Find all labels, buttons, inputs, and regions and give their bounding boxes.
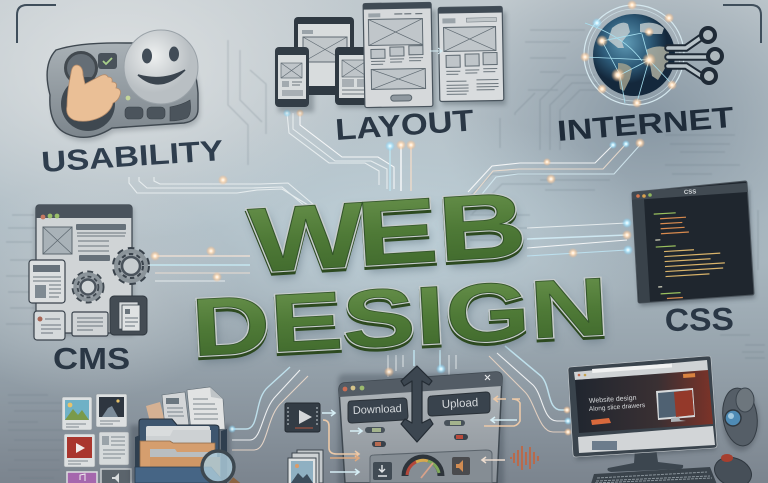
lower cards bbox=[34, 296, 147, 340]
icon: circuit connector bbox=[668, 28, 722, 83]
icon: small mouse bbox=[710, 452, 756, 483]
icon: check button bbox=[98, 53, 117, 69]
icon: smiley face bbox=[124, 30, 198, 104]
icon: keyboard bbox=[590, 467, 718, 483]
website lower strip bbox=[578, 426, 715, 453]
control buttons bbox=[125, 100, 191, 121]
icon: cms layout bbox=[29, 205, 147, 340]
browser wireframe large bbox=[363, 2, 433, 108]
word: web: WEB bbox=[246, 172, 529, 292]
button: download bbox=[348, 398, 408, 423]
icon: magnifier bbox=[202, 451, 241, 483]
icon: sound wave bbox=[510, 446, 538, 470]
label: layout: LAYOUT bbox=[334, 103, 475, 146]
nodes bbox=[580, 0, 677, 108]
title: web design bbox=[189, 172, 613, 380]
label: cms: CMS bbox=[53, 341, 130, 376]
css traces bbox=[527, 223, 627, 256]
word: design: DESIGN bbox=[189, 261, 611, 374]
icon: speaker button bbox=[452, 457, 470, 475]
website hero: Along slice drawers bbox=[589, 402, 646, 413]
icon: folder with documents bbox=[130, 387, 241, 483]
panel: download upload dialog bbox=[338, 366, 504, 483]
title shadow: WEB bbox=[248, 179, 531, 299]
button: upload bbox=[428, 392, 490, 416]
website hero bbox=[575, 370, 713, 433]
label: css: CSS bbox=[664, 301, 734, 338]
icon: thumbs-up hand bbox=[67, 65, 120, 121]
icon: desktop monitor bbox=[568, 356, 717, 472]
hero mini monitor bbox=[656, 388, 695, 422]
thumbnail document bbox=[99, 432, 129, 465]
toggles bbox=[365, 420, 468, 447]
thumbnail speaker bbox=[101, 469, 131, 483]
browser wireframe right bbox=[438, 6, 504, 102]
icon: video clip bbox=[285, 403, 320, 432]
word: web: WEB bbox=[246, 175, 529, 295]
title shadow: DESIGN bbox=[191, 267, 613, 380]
icon: double arrow bbox=[401, 366, 433, 442]
arrows around dialog bbox=[322, 396, 520, 475]
thumbnail audio bbox=[67, 472, 97, 483]
icon: usability controller bbox=[47, 30, 200, 141]
bottom centre traces bbox=[388, 350, 456, 377]
layout centre traces bbox=[390, 146, 411, 191]
monitor frame bbox=[568, 356, 717, 457]
bottom left traces bbox=[232, 367, 308, 450]
icon: speed gauge bbox=[405, 458, 441, 478]
panel card left bbox=[29, 260, 65, 303]
corner bracket: top right bbox=[723, 5, 761, 43]
main cms window bbox=[36, 205, 132, 333]
icon: trackball mouse bbox=[719, 386, 761, 451]
lower control bar bbox=[370, 450, 492, 483]
word: design: DESIGN bbox=[189, 264, 611, 377]
icon: css code editor bbox=[632, 181, 755, 306]
network arcs bbox=[585, 23, 673, 103]
layout phone traces bbox=[287, 113, 394, 189]
title shadow bbox=[191, 179, 613, 380]
icon: small gear bbox=[75, 274, 101, 300]
label: internet: INTERNET bbox=[556, 101, 735, 147]
word: web: WEB bbox=[246, 172, 529, 292]
cms traces bbox=[150, 256, 250, 281]
icon: internet globe bbox=[580, 0, 722, 108]
bottom right traces bbox=[489, 346, 567, 432]
usability traces bbox=[129, 177, 314, 207]
icon: layout devices bbox=[275, 2, 506, 112]
arrow between browsers bbox=[430, 48, 442, 54]
documents bbox=[146, 387, 225, 431]
internet traces bbox=[468, 145, 640, 199]
monitor stand bbox=[607, 448, 683, 472]
icon: download button bbox=[373, 462, 392, 480]
word: design: DESIGN bbox=[189, 261, 611, 374]
button: upload: Upload bbox=[442, 397, 479, 411]
tablet wireframe bbox=[294, 17, 354, 95]
icon: photo stack bbox=[288, 450, 323, 483]
corner bracket: top left bbox=[17, 5, 56, 43]
icon: media thumbnails bbox=[62, 394, 131, 483]
glowing nodes bbox=[150, 109, 645, 436]
thumbnail dark photo bbox=[96, 394, 127, 427]
icon: large gear bbox=[116, 251, 146, 281]
website hero: Website design bbox=[589, 395, 637, 405]
phone wireframe left bbox=[275, 47, 309, 107]
thumbnail video bbox=[64, 434, 95, 467]
phone wireframe right bbox=[335, 47, 375, 105]
folder back bbox=[139, 419, 219, 483]
thumbnail landscape bbox=[62, 397, 92, 430]
continents bbox=[608, 23, 670, 91]
code lines bbox=[654, 210, 727, 299]
circuit lines bbox=[129, 113, 640, 450]
icon: css code editor: CSS bbox=[684, 189, 696, 196]
button: download: Download bbox=[353, 403, 402, 417]
folder front bbox=[135, 467, 225, 483]
label: usability: USABILITY bbox=[40, 134, 224, 178]
